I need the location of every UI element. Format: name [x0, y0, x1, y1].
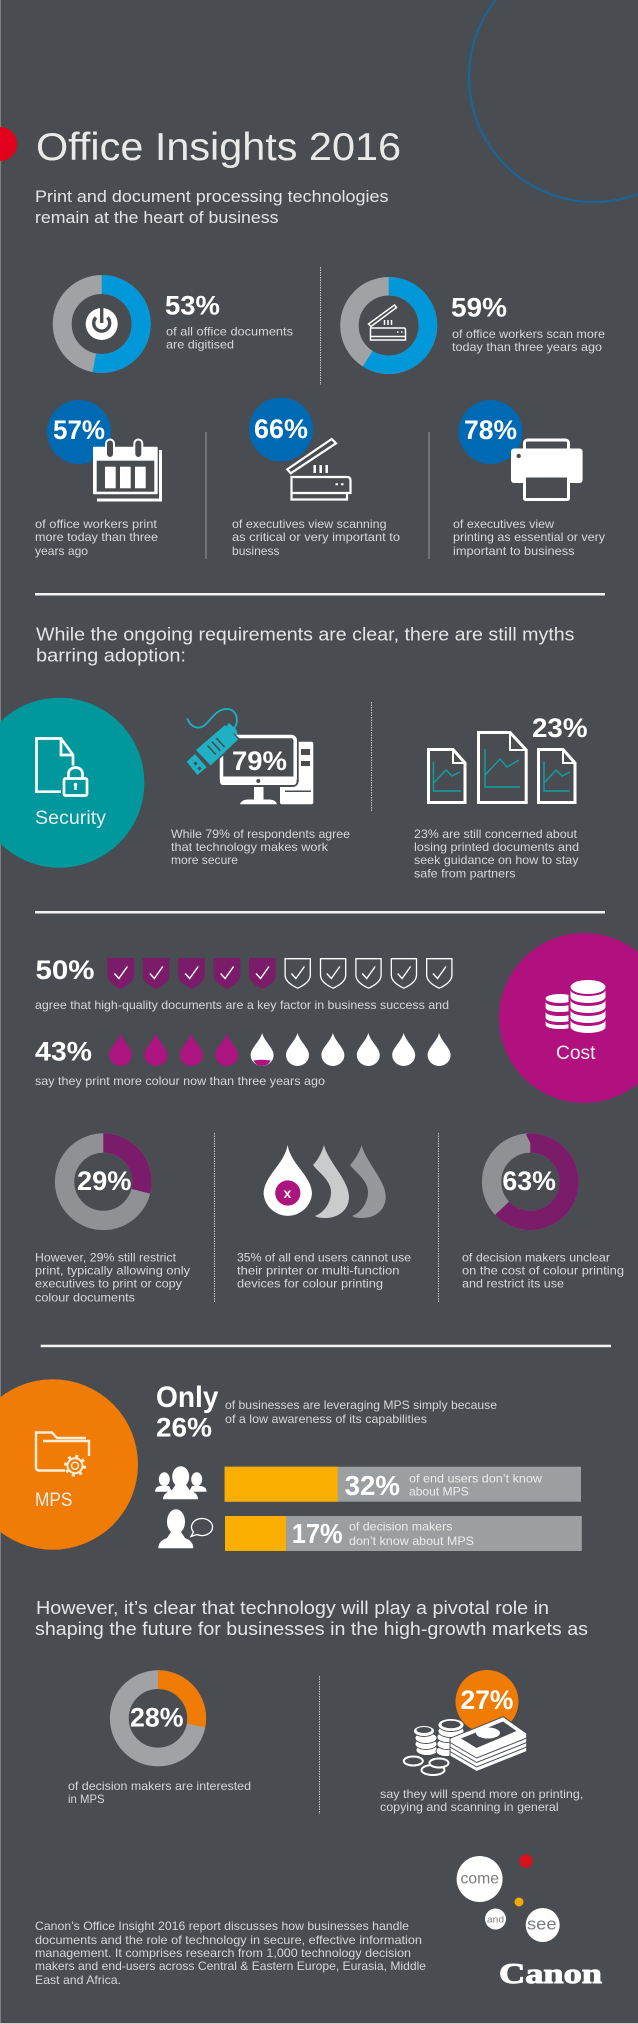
description: say they will spend more on printing,	[380, 1787, 583, 1801]
heading: myths: While the ongoing requirements are clear, there are still myths	[36, 625, 574, 645]
description: 35% of all end users cannot use	[237, 1251, 411, 1265]
description: However, 29% still restrict	[35, 1251, 177, 1265]
description: devices for colour printing	[237, 1277, 383, 1291]
icon: computer with USB	[187, 709, 313, 804]
footer description: East and Africa.	[35, 1973, 121, 1987]
icon: documents with charts	[428, 732, 575, 802]
description: of executives view scanning	[232, 517, 386, 531]
panel: cost circle	[499, 933, 638, 1103]
66% figure: 66%	[254, 414, 308, 444]
50% figure: 50%	[36, 955, 94, 985]
description: of office workers print	[35, 517, 158, 531]
badge 27%	[456, 1670, 518, 1733]
description: more secure	[171, 853, 238, 867]
red dot	[0, 127, 17, 161]
donut chart 59%	[349, 286, 428, 365]
description	[35, 1251, 190, 1305]
icon: money and coins	[404, 1717, 527, 1775]
badge 78%	[458, 400, 522, 464]
description	[452, 327, 605, 354]
59% figure: 59%	[451, 292, 507, 322]
panel: 57% print more	[35, 400, 160, 558]
label: Cost	[556, 1043, 596, 1064]
description	[68, 1779, 251, 1806]
description: seek guidance on how to stay	[414, 853, 578, 867]
27% figure: 27%	[460, 1685, 513, 1715]
57% figure: 57%	[53, 415, 105, 445]
only 26% figure	[156, 1381, 219, 1443]
description: printing as essential or very	[453, 530, 605, 544]
description: colour documents	[35, 1291, 135, 1305]
donut chart 53%	[62, 284, 141, 364]
description: 23% are still concerned about	[414, 827, 578, 841]
come and see bubbles: come	[460, 1870, 499, 1888]
description	[166, 324, 293, 352]
come and see bubbles	[457, 1854, 560, 1942]
footer description: Canon’s Office Insight 2016 report discusses how businesses handle	[35, 1919, 409, 1933]
icon: calendar	[93, 440, 160, 500]
panel: 17% decision makers	[158, 1509, 582, 1551]
panel: 27% spend more	[380, 1670, 583, 1814]
23% figure: 23%	[532, 713, 588, 743]
63% figure: 63%	[502, 1166, 556, 1196]
shields pictogram	[107, 958, 452, 989]
icon: ink drops: x	[284, 1185, 292, 1201]
panel: 28% interested	[68, 1680, 251, 1806]
28% figure: 28%	[130, 1703, 184, 1733]
label: MPS	[35, 1490, 72, 1511]
icon: printer	[511, 440, 583, 500]
description: say they print more colour now than three years ago	[35, 1074, 325, 1088]
description: important to business	[453, 544, 574, 558]
description	[225, 1398, 497, 1426]
description	[232, 517, 400, 558]
description	[380, 1787, 583, 1814]
MPS circle	[0, 1379, 138, 1550]
description: and restrict its use	[462, 1277, 564, 1291]
panel: 66% scanning critical	[232, 398, 400, 558]
43% figure: 43%	[35, 1037, 92, 1067]
description	[35, 517, 158, 558]
footer description	[35, 1919, 426, 1987]
title: Office Insights 2016	[36, 126, 401, 169]
panel: 32% end users	[155, 1466, 581, 1502]
icon: coin stacks	[546, 980, 606, 1033]
description: more today than three	[35, 530, 158, 544]
description: executives to print or copy	[35, 1277, 182, 1291]
Canon logo: Canon	[499, 1958, 602, 1990]
donut chart 29%	[65, 1143, 142, 1220]
panel: only 26%	[156, 1381, 497, 1443]
badge 66%	[249, 398, 313, 462]
description: as critical or very important to	[232, 530, 400, 544]
description: today than three years ago	[452, 340, 602, 354]
panel: 78% printing essential	[453, 400, 605, 558]
description	[237, 1251, 411, 1291]
description	[453, 517, 605, 558]
bar 17%	[225, 1516, 582, 1551]
icon: folder with gear	[36, 1432, 89, 1475]
description: losing printed documents and	[414, 840, 579, 854]
panel: MPS circle	[0, 1379, 138, 1550]
32% figure: 32%	[345, 1470, 400, 1501]
description: don’t know about MPS	[349, 1534, 474, 1548]
53% figure: 53%	[165, 290, 220, 320]
drops pictogram	[109, 1033, 451, 1066]
description: their printer or multi-function	[237, 1264, 400, 1278]
icon: power button	[86, 308, 118, 340]
description: that technology makes work	[171, 840, 329, 854]
panel: 23% concerned	[414, 713, 588, 881]
description	[462, 1251, 624, 1291]
description: of end users don’t know	[409, 1472, 542, 1486]
only 26% figure: 26%	[156, 1413, 212, 1443]
icon: person with speech bubble	[158, 1509, 213, 1548]
badge 57%	[47, 400, 111, 464]
description: agree that high-quality documents are a key factor in business success and	[35, 998, 449, 1012]
description: of decision makers unclear	[462, 1251, 610, 1265]
description: business	[232, 544, 280, 558]
heading: myths	[36, 625, 574, 666]
description: of decision makers	[349, 1520, 452, 1534]
description	[409, 1472, 542, 1499]
panel: 43% print more colour	[35, 1033, 451, 1088]
decorative circle outline	[469, 0, 638, 202]
description: in MPS	[68, 1792, 105, 1806]
description	[349, 1520, 474, 1548]
description: copying and scanning in general	[380, 1800, 559, 1814]
heading: pivotal role: shaping the future for businesses in the high-growth markets as	[35, 1619, 588, 1639]
description: on the cost of colour printing	[462, 1264, 624, 1278]
description: are digitised	[166, 338, 234, 352]
29% figure: 29%	[77, 1166, 131, 1196]
footer description: makers and end-users across Central & Eastern Europe, Eurasia, Middle	[35, 1959, 426, 1973]
security circle	[0, 698, 144, 868]
icon: small scanner	[368, 305, 406, 340]
icon: scanner	[287, 439, 350, 500]
icon: group of people	[155, 1466, 207, 1499]
footer description: documents and the role of technology in secure, effective information	[35, 1933, 422, 1947]
only 26% figure: Only	[156, 1381, 219, 1414]
description: of businesses are leveraging MPS simply because	[225, 1398, 497, 1412]
cost circle	[499, 933, 638, 1103]
description: about MPS	[409, 1485, 469, 1499]
78% figure: 78%	[464, 415, 517, 445]
description: of a low awareness of its capabilities	[225, 1412, 427, 1426]
description	[414, 827, 579, 881]
description: years ago	[35, 544, 88, 558]
heading: myths: barring adoption:	[36, 646, 186, 666]
description	[171, 827, 350, 867]
panel: 79% technology secure	[171, 709, 350, 867]
subtitle: Print and document processing technologies	[35, 188, 388, 206]
panel: security	[0, 698, 144, 868]
donut chart 28%	[119, 1680, 197, 1757]
donut chart 63%	[492, 1143, 569, 1220]
panel: 59% scan more	[349, 286, 605, 365]
subtitle	[35, 188, 388, 227]
come and see bubbles: and	[487, 1914, 504, 1926]
17% figure: 17%	[292, 1518, 343, 1549]
icon: ink drops	[264, 1145, 386, 1218]
description: of decision makers are interested	[68, 1779, 251, 1793]
footer description: management. It comprises research from 1,000 technology decision	[35, 1946, 411, 1960]
panel: 29% restrict print	[35, 1143, 190, 1305]
description: of all office documents	[166, 324, 293, 338]
description: print, typically allowing only	[35, 1264, 190, 1278]
description: safe from partners	[414, 867, 516, 881]
79% figure: 79%	[232, 746, 287, 776]
heading: pivotal role	[35, 1598, 588, 1639]
bar 32%	[225, 1467, 581, 1502]
panel: 63% unclear on cost	[462, 1143, 624, 1291]
panel: 50% high-quality documents	[35, 955, 452, 1012]
label: Security	[35, 808, 107, 829]
description: of office workers scan more	[452, 327, 605, 341]
description: While 79% of respondents agree	[171, 827, 350, 841]
subtitle: remain at the heart of business	[35, 209, 278, 227]
heading: pivotal role: However, it’s clear that technology will play a pivotal role in	[36, 1598, 549, 1618]
come and see bubbles: see	[527, 1914, 556, 1934]
description: of executives view	[453, 517, 554, 531]
panel: 35% cannot use colour	[237, 1145, 411, 1291]
icon: document with lock	[36, 738, 87, 796]
panel: 53% digitised	[62, 284, 293, 364]
